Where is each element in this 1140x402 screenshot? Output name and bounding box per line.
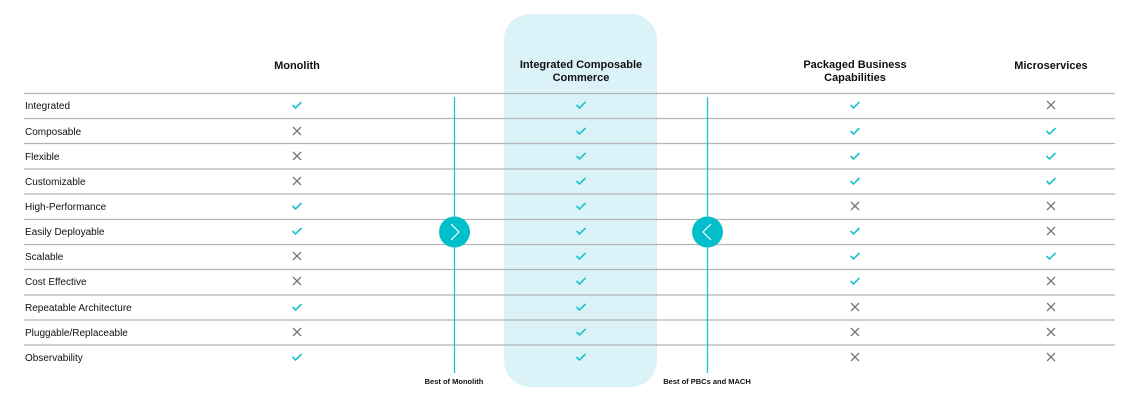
Monolith marks bbox=[292, 102, 302, 360]
column headers: Microservices bbox=[1014, 60, 1088, 72]
row labels: Flexible bbox=[25, 152, 60, 163]
grid lines bbox=[24, 94, 1115, 345]
column headers: Monolith bbox=[274, 60, 320, 72]
arrow: best of monolith: Best of Monolith bbox=[425, 377, 484, 386]
row labels: Observability bbox=[25, 353, 83, 364]
row labels: High-Performance bbox=[25, 202, 107, 213]
row labels: Customizable bbox=[25, 177, 86, 188]
PBC marks bbox=[850, 102, 860, 361]
arrow: best of monolith bbox=[425, 97, 484, 386]
row labels: Composable bbox=[25, 127, 82, 138]
column headers bbox=[274, 59, 1088, 84]
column headers: Capabilities bbox=[824, 72, 886, 84]
row labels: Cost Effective bbox=[25, 277, 87, 288]
row labels: Integrated bbox=[25, 101, 70, 112]
row labels: Easily Deployable bbox=[25, 227, 105, 238]
column headers: Commerce bbox=[553, 72, 609, 84]
column headers: Packaged Business bbox=[803, 59, 907, 71]
arrow: best of PBCs and MACH: Best of PBCs and MACH bbox=[663, 377, 751, 386]
Microservices marks bbox=[1046, 101, 1056, 361]
row labels: Repeatable Architecture bbox=[25, 303, 132, 314]
highlight column: Integrated Composable Commerce bbox=[504, 14, 657, 387]
row labels bbox=[25, 101, 132, 364]
ICC marks bbox=[576, 102, 586, 360]
row labels: Pluggable/Replaceable bbox=[25, 328, 128, 339]
column headers: Integrated Composable bbox=[520, 59, 642, 71]
arrow: best of PBCs and MACH bbox=[663, 97, 751, 386]
row labels: Scalable bbox=[25, 252, 64, 263]
